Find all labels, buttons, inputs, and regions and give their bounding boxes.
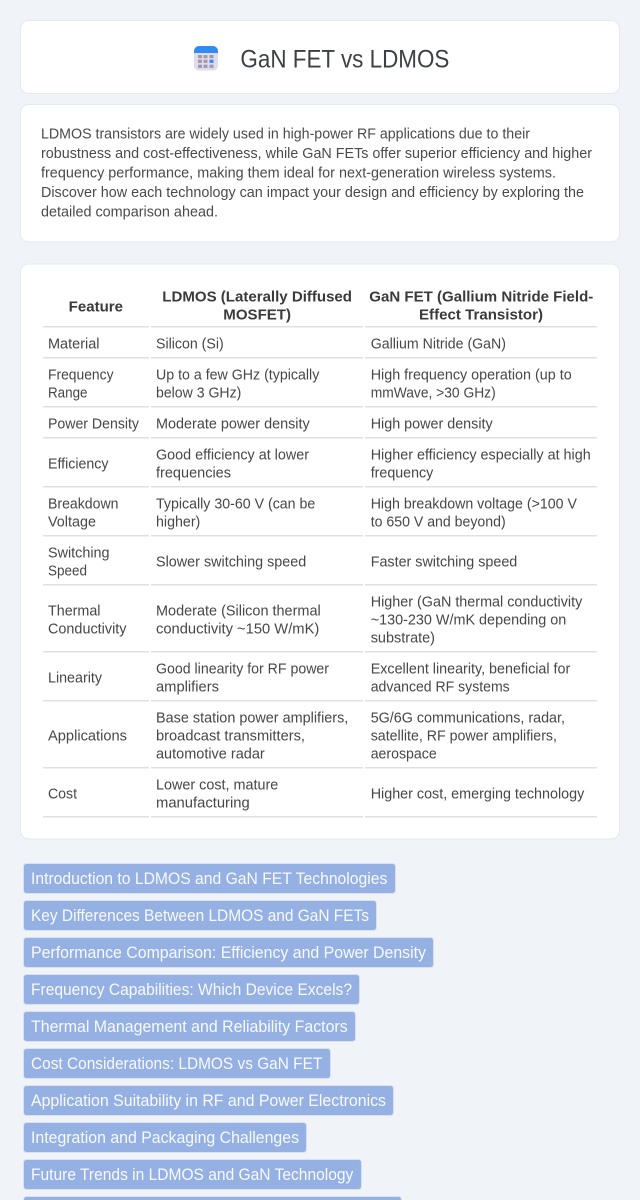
- text block: intro paragraph: detailed comparison ahead.: [41, 205, 218, 221]
- row: power density: [43, 416, 597, 438]
- topic: introduction: Introduction to LDMOS and GaN FET Technologies: [31, 870, 387, 888]
- link list: section topics: [24, 864, 434, 1200]
- row: frequency range: Up to a few GHz (typically: [156, 367, 320, 383]
- topic: integration and packaging: [24, 1122, 306, 1152]
- row: efficiency: Higher efficiency especially at high: [371, 447, 591, 463]
- row: linearity: Linearity: [48, 670, 103, 686]
- row: frequency range: High frequency operation (up to: [371, 367, 572, 383]
- text block: intro paragraph: LDMOS transistors are widely used in high-power RF applications due to their: [41, 127, 530, 143]
- topic: frequency capabilities: Frequency Capabilities: Which Device Excels?: [31, 981, 352, 999]
- row: efficiency: Good efficiency at lower: [156, 447, 309, 463]
- row: applications: broadcast transmitters,: [156, 728, 305, 744]
- row: thermal conductivity: [43, 594, 597, 652]
- row: frequency range: Frequency: [48, 367, 114, 383]
- row: switching speed: [43, 545, 597, 586]
- row: applications: [43, 710, 597, 768]
- panel: introduction: [20, 104, 620, 242]
- row: thermal conductivity: Conductivity: [48, 621, 127, 637]
- row: power density: Power Density: [48, 416, 140, 432]
- row: thermal conductivity: substrate): [371, 630, 435, 646]
- row: breakdown voltage: High breakdown voltage (>100 V: [371, 496, 577, 512]
- row: switching speed: Faster switching speed: [371, 554, 517, 570]
- row: material: Gallium Nitride (GaN): [371, 336, 506, 352]
- topic: clipped final item: [24, 1196, 402, 1200]
- row: switching speed: Switching: [48, 545, 110, 561]
- row: breakdown voltage: higher): [156, 514, 200, 530]
- row: cost: Cost: [48, 786, 77, 802]
- table header row: LDMOS (Laterally Diffused: [162, 290, 352, 306]
- topic: integration and packaging: Integration and Packaging Challenges: [31, 1129, 299, 1147]
- topic: performance comparison: [24, 938, 434, 968]
- row: thermal conductivity: Higher (GaN thermal conductivity: [371, 594, 583, 610]
- row: applications: automotive radar: [156, 746, 265, 762]
- text block: intro paragraph: [41, 127, 592, 221]
- topic: future trends: Future Trends in LDMOS and GaN Technology: [31, 1166, 354, 1184]
- topic: key differences: [24, 900, 376, 930]
- table header row: GaN FET (Gallium Nitride Field-: [369, 290, 593, 306]
- row: cost: Lower cost, mature: [156, 777, 278, 793]
- topic: cost considerations: Cost Considerations: LDMOS vs GaN FET: [31, 1055, 322, 1073]
- row: linearity: advanced RF systems: [371, 679, 510, 695]
- row: linearity: [43, 661, 597, 702]
- row: thermal conductivity: Thermal: [48, 603, 100, 619]
- row: linearity: Excellent linearity, beneficial for: [371, 661, 570, 677]
- topic: thermal management: [24, 1012, 356, 1042]
- topic: thermal management: Thermal Management and Reliability Factors: [31, 1018, 348, 1036]
- row: cost: [43, 777, 597, 818]
- table header row: [43, 290, 597, 328]
- text block: intro paragraph: Discover how each technology can impact your design and efficiency by exploring the: [41, 185, 584, 201]
- topic: application suitability: [24, 1086, 394, 1116]
- topic: key differences: Key Differences Between LDMOS and GaN FETs: [31, 907, 369, 925]
- row: linearity: amplifiers: [156, 679, 219, 695]
- row: frequency range: below 3 GHz): [156, 385, 241, 401]
- row: breakdown voltage: Voltage: [48, 514, 96, 530]
- text block: intro paragraph: frequency performance, making them ideal for next-generation wireless systems.: [41, 166, 556, 182]
- row: breakdown voltage: to 650 V and beyond): [371, 514, 506, 530]
- row: efficiency: frequency: [371, 465, 434, 481]
- row: frequency range: [43, 367, 597, 408]
- topic: cost considerations: [24, 1048, 330, 1078]
- row: cost: manufacturing: [156, 795, 250, 811]
- table header row: Effect Transistor): [419, 308, 543, 324]
- row: frequency range: mmWave, >30 GHz): [371, 385, 496, 401]
- row: breakdown voltage: Typically 30-60 V (can be: [156, 496, 315, 512]
- table header row: MOSFET): [223, 308, 291, 324]
- row: breakdown voltage: Breakdown: [48, 496, 118, 512]
- row: material: Silicon (Si): [156, 336, 224, 352]
- topic: performance comparison: Performance Comparison: Efficiency and Power Density: [31, 944, 427, 962]
- row: power density: Moderate power density: [156, 416, 310, 432]
- row: linearity: Good linearity for RF power: [156, 661, 329, 677]
- topic: future trends: [24, 1160, 362, 1190]
- row: frequency range: Range: [48, 385, 88, 401]
- row: thermal conductivity: ~130-230 W/mK depending on: [371, 612, 566, 628]
- topic: frequency capabilities: [24, 974, 360, 1004]
- row: power density: High power density: [371, 416, 493, 432]
- topic: application suitability: Application Suitability in RF and Power Electronics: [31, 1092, 386, 1110]
- row: thermal conductivity: Moderate (Silicon thermal: [156, 603, 321, 619]
- row: material: Material: [48, 336, 100, 352]
- row: switching speed: Speed: [48, 563, 87, 579]
- row: efficiency: [43, 447, 597, 488]
- table header row: Feature: [69, 300, 123, 316]
- row: switching speed: Slower switching speed: [156, 554, 306, 570]
- title: GaN FET vs LDMOS: [240, 45, 449, 73]
- row: efficiency: frequencies: [156, 465, 231, 481]
- panel: header: [20, 20, 620, 94]
- row: efficiency: Efficiency: [48, 456, 109, 472]
- row: breakdown voltage: [43, 496, 597, 536]
- row: applications: Applications: [48, 728, 127, 744]
- text block: intro paragraph: robustness and cost-effectiveness, while GaN FETs offer superior efficiency and higher: [41, 146, 592, 162]
- row: applications: Base station power amplifiers,: [156, 710, 348, 726]
- row: thermal conductivity: conductivity ~150 W/mK): [156, 621, 319, 637]
- row: cost: Higher cost, emerging technology: [371, 786, 585, 802]
- row: applications: satellite, RF power amplifiers,: [371, 728, 557, 744]
- panel: comparison table: [20, 264, 620, 839]
- row: material: [43, 336, 597, 358]
- topic: introduction: [24, 864, 396, 894]
- row: applications: aerospace: [371, 746, 437, 762]
- row: applications: 5G/6G communications, radar,: [371, 710, 565, 726]
- icon: calendar: [194, 46, 218, 70]
